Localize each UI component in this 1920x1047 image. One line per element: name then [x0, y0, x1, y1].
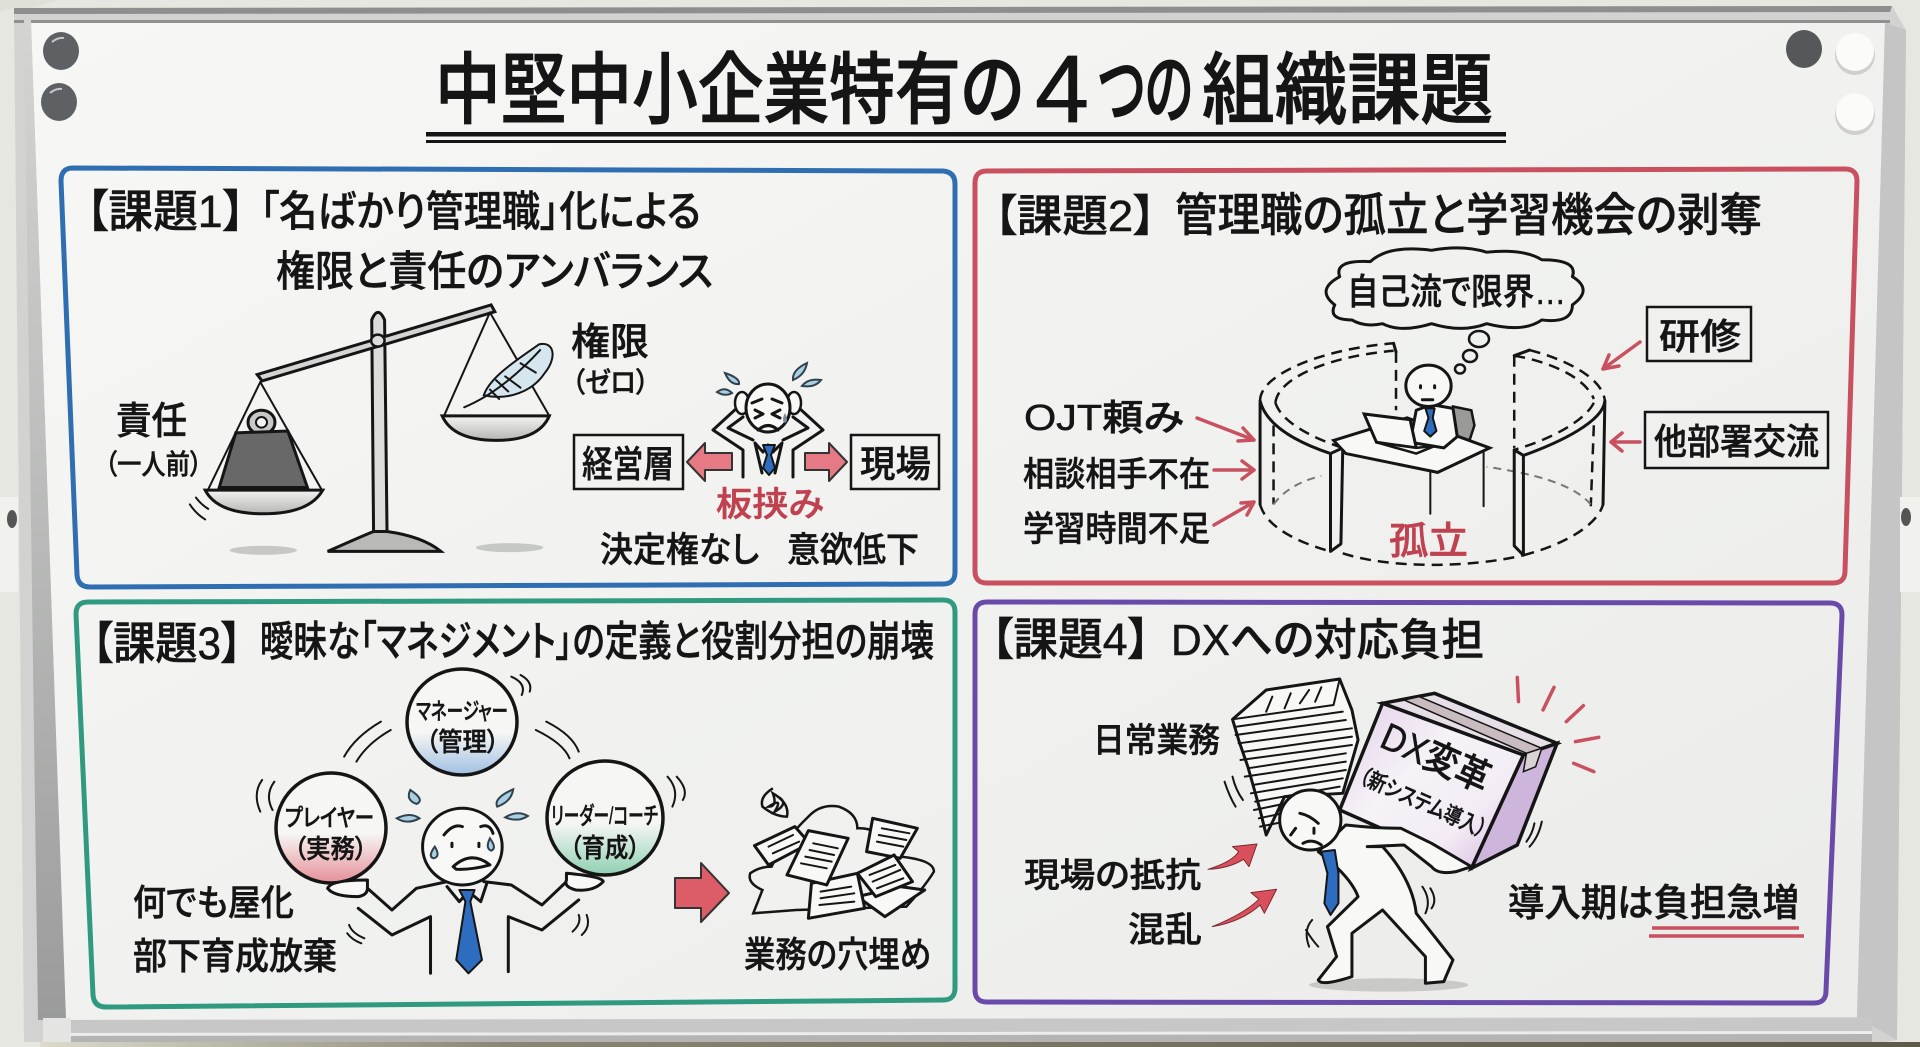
icon: overloaded worker [1208, 677, 1599, 992]
thought cloud [1326, 248, 1583, 374]
heading: 課題3: 曖昧な「マネジメント」の定義と役割分担の崩壊 [260, 618, 934, 665]
label: 責任: （一人前） [105, 449, 202, 480]
arrow: pull to 経営層 [687, 443, 732, 481]
text: 何でも屋化: 何でも屋化 [133, 882, 294, 923]
text: 業務の穴埋め: 業務の穴埋め [744, 934, 931, 975]
panel: 課題1 [61, 168, 955, 587]
title: 4 [1035, 36, 1089, 143]
ball: リーダー/コーチ（育成） [547, 761, 663, 875]
box: 現場 [851, 435, 939, 489]
text: 学習時間不足: 学習時間不足 [1023, 510, 1210, 549]
text: 日常業務: 日常業務 [1093, 722, 1220, 760]
panel: 課題3 [76, 600, 955, 1007]
label: 権限: 権限 [571, 322, 649, 364]
label: 孤立: 孤立 [1389, 521, 1468, 563]
text: DX変革 on box: DX変革 [1374, 716, 1496, 801]
illustration: balance scale [190, 305, 553, 555]
text: 混乱: 混乱 [1128, 911, 1202, 950]
text: 部下育成放棄: 部下育成放棄 [133, 936, 337, 977]
label: 権限 [571, 322, 649, 398]
ball: マネージャー（管理） [407, 669, 517, 775]
text: 相談相手不在: 相談相手不在 [1023, 456, 1210, 494]
title: つの [1098, 46, 1193, 134]
box: 他部署交流 [1645, 412, 1828, 468]
icon: juggling manager [328, 789, 603, 973]
panel: 課題4 [975, 602, 1842, 1003]
heading: 課題3 [92, 618, 934, 669]
arrows: pressure on worker [1208, 844, 1277, 927]
text: 現場の抵抗: 現場の抵抗 [1024, 857, 1201, 895]
heading: 課題2: 管理職の孤立と学習機会の剥奪 [1175, 189, 1762, 241]
ball: リーダー/コーチ（育成）: リーダー/コーチ [551, 803, 658, 830]
box: 研修 [1647, 307, 1751, 361]
box: DX変革 [1340, 693, 1557, 868]
box: 研修: 研修 [1659, 316, 1741, 357]
title: 中堅中小企業特有の [435, 46, 1024, 134]
icon: crumpled paper pile [750, 788, 934, 918]
box: 経営層: 経営層 [582, 444, 674, 485]
ball: マネージャー（管理）: （管理） [426, 727, 499, 757]
box: 経営層 [574, 435, 683, 489]
ball: プレイヤー（実務）: プレイヤー [285, 805, 374, 832]
ball: プレイヤー（実務） [276, 773, 386, 883]
ball: プレイヤー（実務）: （実務） [294, 834, 367, 864]
text: 導入期は負担急増: 導入期は負担急増 [1508, 883, 1799, 925]
label: 権限: （ゼロ） [572, 367, 649, 398]
magnets [41, 30, 1875, 135]
box: 他部署交流: 他部署交流 [1654, 421, 1819, 462]
arrows: barriers to wall [1197, 418, 1254, 525]
heading: 課題4 [991, 614, 1484, 665]
arrow: 研修 to wall [1603, 342, 1640, 369]
arrow: pull to 現場 [805, 443, 847, 481]
paper stack [1233, 679, 1358, 835]
heading: 課題2: 【課題2】 [994, 192, 1156, 241]
text: OJT頼み: OJT頼み [1024, 397, 1184, 438]
arrow: red to papers [675, 863, 729, 922]
heading: 課題1 [86, 186, 713, 295]
arrow: 他部署交流 to wall [1611, 433, 1640, 451]
icon: feather [464, 344, 553, 407]
text: 意欲低下: 意欲低下 [787, 531, 919, 570]
label: 責任: 責任 [116, 401, 187, 443]
ball: マネージャー（管理）: マネージャー [416, 698, 508, 724]
heading: 課題1: 権限と責任のアンバランス [276, 248, 713, 295]
icon: stressed manager [713, 363, 823, 477]
heading: 課題1: 「名ばかり管理職」化による [260, 188, 701, 235]
heading: 課題4: 【課題4】 [991, 614, 1150, 665]
motion lines [257, 675, 685, 943]
ball: リーダー/コーチ（育成）: （育成） [570, 833, 640, 863]
illustration: isolation wall with manager [1260, 343, 1605, 565]
heading: 課題3: 【課題3】 [92, 618, 242, 669]
heading: 課題4: DXへの対応負担 [1171, 616, 1484, 665]
title [426, 36, 1506, 143]
label: 責任 [105, 401, 202, 480]
panel: 課題2 [975, 169, 1857, 583]
text: 新システム導入 on box: （新システム導入） [1356, 764, 1490, 842]
text: 決定権なし: 決定権なし [600, 531, 759, 570]
box: 現場: 現場 [860, 444, 931, 485]
heading: 課題1: 【課題1】 [86, 186, 245, 237]
thought cloud: 自己流で限界… [1347, 271, 1566, 312]
title: 組織課題 [1202, 46, 1493, 134]
label: 板挟み: 板挟み [716, 486, 824, 524]
